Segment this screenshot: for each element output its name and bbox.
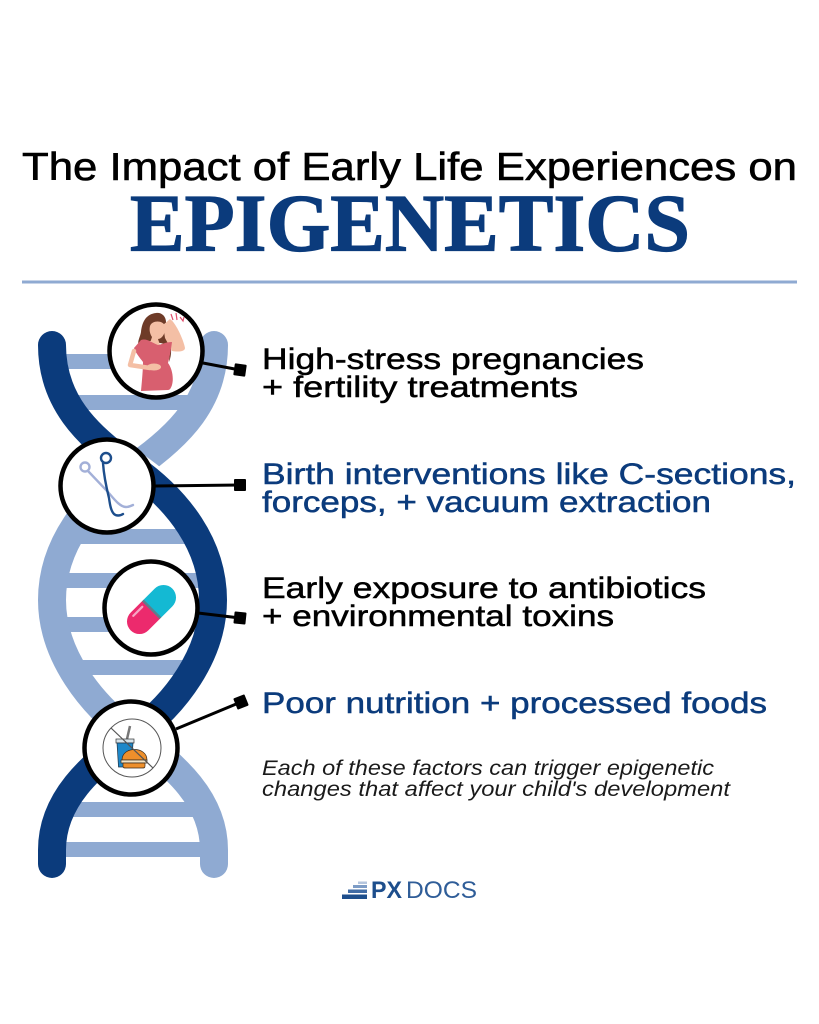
item 2 text — [262, 458, 796, 519]
light strand — [52, 345, 214, 864]
light forceps — [80, 462, 133, 507]
connector 4 — [176, 694, 249, 729]
title — [22, 146, 797, 268]
title line: The Impact of Early Life Experiences on — [22, 146, 797, 189]
item 4 text: Poor nutrition + processed foods — [262, 687, 767, 720]
item 2 text: forceps, + vacuum extraction — [262, 486, 711, 519]
dna rungs — [62, 354, 204, 857]
dna helix — [52, 345, 214, 864]
dark forceps — [101, 453, 123, 516]
logo: PX Docs — [342, 877, 477, 904]
icon: no processed food — [84, 702, 178, 794]
italic note: changes that affect your child's development — [262, 778, 731, 801]
item 2 text: Birth interventions like C-sections, — [262, 458, 796, 491]
connector 3 — [198, 611, 247, 625]
connector 2 — [155, 479, 246, 491]
item 1 text — [262, 343, 644, 404]
logo: PX Docs: DOCS — [406, 877, 477, 904]
item 1 text: + fertility treatments — [262, 371, 578, 404]
icon: stressed pregnant woman — [110, 304, 202, 398]
logo steps — [342, 882, 367, 899]
italic note — [262, 757, 731, 801]
logo: PX Docs: PX — [371, 877, 402, 904]
title keyword: EPIGENETICS — [130, 178, 690, 268]
icon: forceps — [60, 440, 154, 532]
item 1 text: High-stress pregnancies — [262, 343, 644, 376]
italic note: Each of these factors can trigger epigenetic — [262, 757, 715, 780]
item 3 text — [262, 572, 706, 633]
item 3 text: + environmental toxins — [262, 600, 614, 633]
burger — [121, 750, 147, 768]
item 3 text: Early exposure to antibiotics — [262, 572, 706, 605]
cup — [116, 726, 134, 767]
dark strand — [52, 345, 213, 864]
icon: capsule — [104, 562, 198, 654]
connector 1 — [203, 363, 247, 377]
